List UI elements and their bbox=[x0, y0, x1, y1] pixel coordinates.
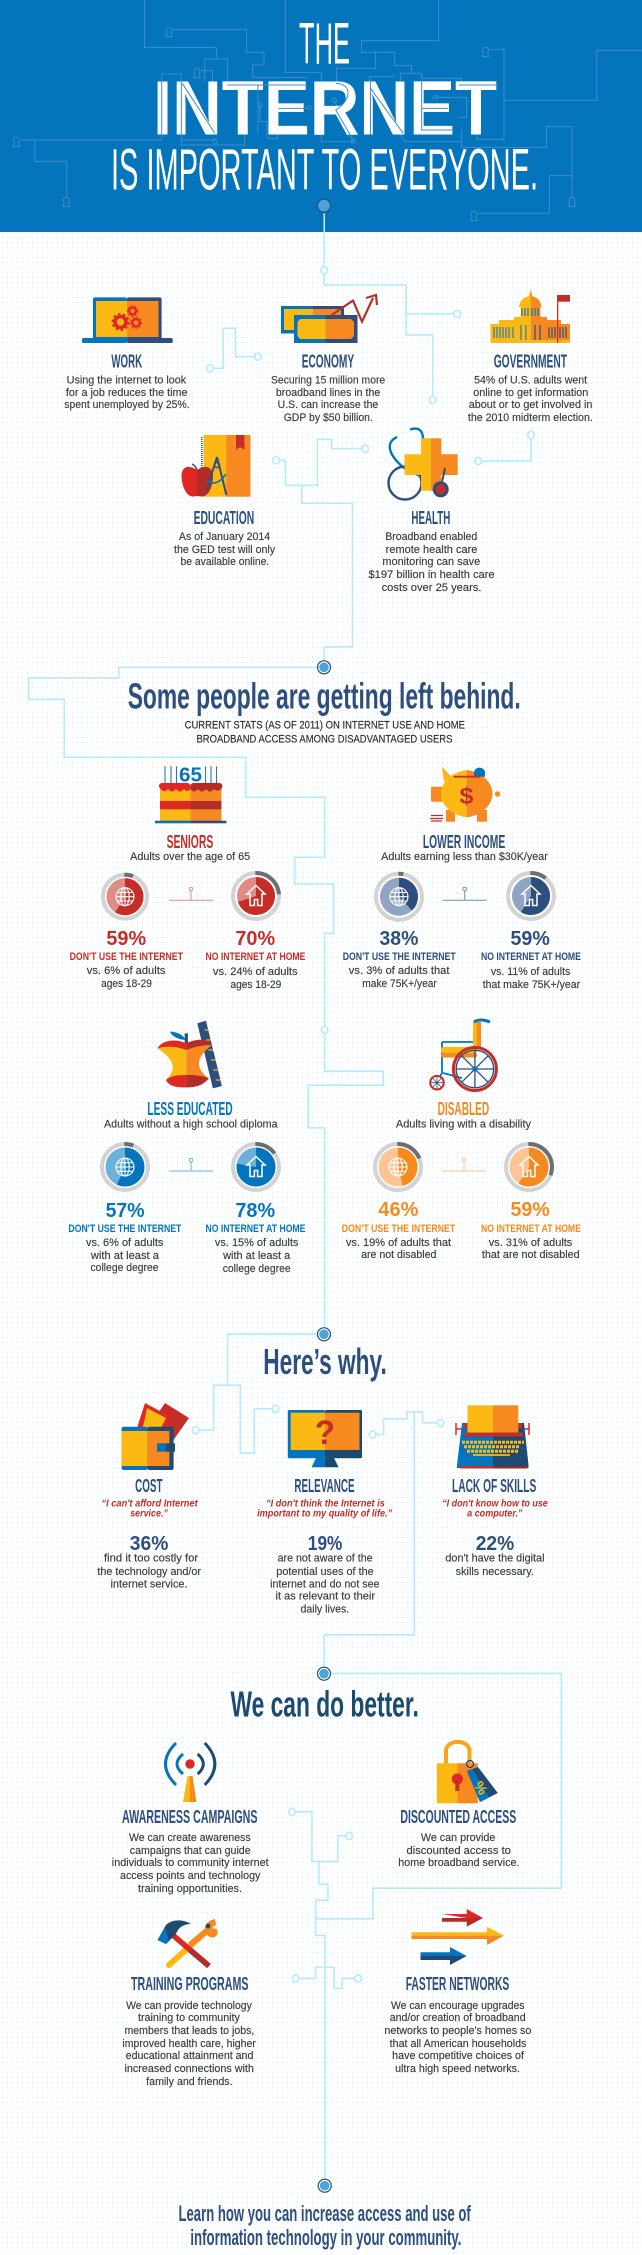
stat: 78 percent no internet at home: 78% bbox=[235, 1199, 275, 1222]
text: awareness description: campaigns that can guide bbox=[130, 1845, 251, 1857]
heading: we can do better: We can do better. bbox=[230, 1684, 419, 1725]
text: economy stat: Securing 15 million more bbox=[271, 374, 385, 386]
panel: government bbox=[468, 289, 593, 424]
text: government stat: 54% of U.S. adults went bbox=[474, 374, 587, 386]
text: government stat: online to get information bbox=[473, 387, 588, 399]
heading: lower income: LOWER INCOME bbox=[423, 831, 505, 852]
text: relevance explanation bbox=[270, 1553, 380, 1616]
stat: 38 percent don't use the internet: DON'T USE THE INTERNET bbox=[343, 951, 456, 963]
stat: 70 percent no internet at home bbox=[206, 927, 306, 991]
panel: awareness campaigns bbox=[112, 1743, 269, 1895]
connector: seniors bbox=[169, 887, 213, 900]
text: economy stat: GDP by $50 billion. bbox=[284, 412, 373, 424]
text: skills explanation: don't have the digital bbox=[445, 1553, 544, 1565]
connector lines: section four bbox=[289, 1673, 561, 2181]
icon: birthday cake bbox=[155, 765, 226, 823]
node: header bbox=[318, 199, 330, 212]
text: economy stat bbox=[271, 374, 385, 424]
text: health stat: remote health care bbox=[386, 544, 477, 556]
stat: 78 percent no internet at home: college degree bbox=[223, 1263, 291, 1275]
icon: broadcast antenna bbox=[166, 1743, 215, 1802]
stat: 59 percent don't use the internet bbox=[70, 927, 183, 990]
node: footer bbox=[318, 2179, 331, 2192]
icon: padlock with price tag: % bbox=[471, 1778, 492, 1798]
text: training description: improved health care, higher bbox=[122, 2038, 256, 2050]
panel: header banner bbox=[0, 0, 642, 232]
heading: lack of skills: LACK OF SKILLS bbox=[452, 1475, 536, 1496]
header circuit lines bbox=[13, 0, 642, 221]
footer: call to action bbox=[178, 2201, 471, 2250]
text: awareness description: We can create awareness bbox=[129, 1832, 251, 1844]
text: work stat: Using the internet to look bbox=[67, 374, 187, 386]
panel: less educated bbox=[68, 1021, 306, 1275]
icon: wheelchair bbox=[430, 1020, 496, 1090]
text: cost explanation: internet service. bbox=[110, 1579, 188, 1591]
inline strokes across the title letters bbox=[162, 80, 497, 142]
stat: 59 percent no internet at home: 59% bbox=[510, 1198, 550, 1221]
text: work stat bbox=[64, 374, 190, 411]
node: section three bbox=[318, 1328, 330, 1341]
panel: faster networks bbox=[384, 1909, 532, 2075]
text: less educated description: Adults without a high school diploma bbox=[104, 1118, 278, 1130]
text: cost explanation: find it too costly for bbox=[104, 1553, 199, 1565]
quote: lack of skills: “I don't know how to use bbox=[442, 1499, 548, 1510]
stat: 59 percent no internet at home: vs. 31% of adults bbox=[489, 1237, 572, 1249]
text: work stat: for a job reduces the time bbox=[66, 387, 188, 399]
chart: less educated don't use internet donut bbox=[102, 1144, 148, 1190]
panel: lack of skills bbox=[442, 1405, 548, 1578]
quote: cost: “I can't afford Internet bbox=[102, 1499, 198, 1510]
text: economy stat: U.S. can increase the bbox=[278, 399, 378, 411]
heading: education: EDUCATION bbox=[194, 507, 254, 528]
heading: training programs: TRAINING PROGRAMS bbox=[131, 1973, 248, 1994]
footer: call to action: information technology in your community. bbox=[190, 2225, 461, 2250]
connector: less educated bbox=[169, 1158, 213, 1171]
stat: 57 percent don't use the internet: college degree bbox=[90, 1262, 159, 1274]
stat: 59 percent don't use the internet: 59% bbox=[106, 927, 146, 950]
text: training description: members that leads to jobs, bbox=[124, 2025, 254, 2037]
stat: 78 percent no internet at home: NO INTERNET AT HOME bbox=[206, 1223, 306, 1235]
stat: 59 percent no internet at home: 59% bbox=[510, 927, 550, 950]
stat: 59 percent don't use the internet: ages 18-29 bbox=[101, 978, 152, 990]
text: training description: training to community bbox=[138, 2012, 241, 2024]
text: lower income description: Adults earning less than $30K/year bbox=[381, 851, 548, 863]
heading: seniors: SENIORS bbox=[167, 831, 213, 852]
stat: 59 percent no internet at home: NO INTERNET AT HOME bbox=[481, 1223, 581, 1235]
chart: less educated no internet at home donut bbox=[233, 1144, 279, 1190]
connector lines: section two bbox=[29, 667, 383, 1328]
node: section two bbox=[318, 661, 330, 674]
text: economy stat: broadband lines in the bbox=[276, 387, 380, 399]
text: health stat: $197 billion in health care bbox=[368, 569, 495, 581]
text: skills explanation: skills necessary. bbox=[456, 1566, 534, 1578]
text: faster networks description: that all American households bbox=[390, 2038, 526, 2050]
text: faster networks description: ultra high speed networks. bbox=[395, 2063, 520, 2075]
text: training description: We can provide technology bbox=[126, 2000, 252, 2012]
text: awareness description: individuals to community internet bbox=[112, 1857, 269, 1869]
panel: discounted access bbox=[398, 1742, 520, 1869]
stat: 70 percent no internet at home: ages 18-29 bbox=[230, 979, 281, 991]
stat: 78 percent no internet at home: with at least a bbox=[222, 1250, 290, 1262]
text: education stat bbox=[174, 531, 276, 568]
icon: piggy bank: $ bbox=[460, 783, 474, 809]
panel: economy bbox=[271, 295, 385, 424]
heading: less educated: LESS EDUCATED bbox=[147, 1098, 233, 1119]
icon: piggy bank bbox=[430, 767, 500, 822]
text: relevance explanation: are not aware of the bbox=[278, 1553, 373, 1565]
text: awareness description bbox=[112, 1832, 269, 1895]
stat: 57 percent don't use the internet: vs. 6% of adults bbox=[86, 1237, 163, 1249]
quote: relevance: “I don't think the Internet is bbox=[266, 1499, 385, 1510]
quote: relevance bbox=[257, 1499, 393, 1520]
connector: lower income bbox=[442, 887, 487, 900]
icon: monitor with question mark: ? bbox=[315, 1414, 335, 1452]
icon: medical cross and stethoscope bbox=[388, 429, 458, 500]
text: discounted description bbox=[398, 1832, 520, 1869]
title: Internet: INTERNET bbox=[153, 65, 497, 151]
text: relevance explanation: potential uses of the bbox=[276, 1566, 374, 1578]
heading: cost: COST bbox=[135, 1475, 163, 1496]
text: education stat: the GED test will only bbox=[174, 544, 276, 556]
panel: relevance bbox=[257, 1410, 393, 1616]
text: relevance explanation: it as relevant to their bbox=[276, 1591, 375, 1603]
text: government stat: the 2010 midterm election. bbox=[468, 412, 593, 424]
chart: lower income don't use internet donut bbox=[376, 874, 422, 920]
heading: discounted access: DISCOUNTED ACCESS bbox=[400, 1806, 516, 1827]
text: government stat: about or to get involved in bbox=[469, 399, 593, 411]
text: relevance explanation: daily lives. bbox=[300, 1604, 349, 1616]
stat: 36 percent: 36% bbox=[130, 1532, 168, 1555]
stat: 38 percent don't use the internet: 38% bbox=[380, 927, 418, 950]
text: government stat bbox=[468, 374, 593, 424]
icon: book, apple and compass bbox=[181, 435, 250, 497]
text: training description: educational attainment and bbox=[126, 2050, 254, 2062]
icon: typewriter bbox=[456, 1405, 529, 1468]
icon: birthday cake: 65 bbox=[179, 765, 202, 787]
stat: 57 percent don't use the internet bbox=[68, 1199, 181, 1274]
connector lines: section one bbox=[207, 213, 534, 667]
icon: laptop bbox=[82, 297, 173, 343]
icon: money and growth arrow bbox=[281, 295, 377, 343]
text: discounted description: home broadband service. bbox=[398, 1857, 520, 1869]
text: discounted description: We can provide bbox=[421, 1832, 495, 1844]
text: faster networks description: We can encourage upgrades bbox=[391, 2000, 524, 2012]
stat: 59 percent no internet at home bbox=[481, 1198, 581, 1261]
stat: 78 percent no internet at home: vs. 15% of adults bbox=[215, 1237, 298, 1249]
stat: 59 percent no internet at home: NO INTERNET AT HOME bbox=[481, 951, 581, 963]
subheading: current stats: BROADBAND ACCESS AMONG DISADVANTAGED USERS bbox=[196, 733, 452, 745]
stat: 59 percent don't use the internet: DON'T USE THE INTERNET bbox=[70, 951, 183, 963]
text: discounted description: discounted access to bbox=[406, 1845, 511, 1857]
heading: government: GOVERNMENT bbox=[494, 350, 567, 371]
stat: 46 percent don't use the internet bbox=[342, 1198, 455, 1261]
text: cost explanation: the technology and/or bbox=[97, 1566, 201, 1578]
icon: monitor with question mark bbox=[288, 1410, 362, 1467]
panel: cost bbox=[97, 1403, 201, 1591]
heading: disabled: DISABLED bbox=[438, 1098, 489, 1119]
text: cost explanation bbox=[97, 1553, 201, 1591]
heading: here's why: Here’s why. bbox=[263, 1341, 387, 1382]
quote: lack of skills bbox=[442, 1499, 548, 1520]
heading: economy: ECONOMY bbox=[302, 350, 354, 371]
stat: 59 percent no internet at home: vs. 11% of adults bbox=[491, 966, 570, 978]
text: faster networks description: have competitive choices of bbox=[392, 2050, 524, 2062]
heading: relevance: RELEVANCE bbox=[294, 1475, 355, 1496]
quote: lack of skills: a computer.” bbox=[467, 1509, 523, 1520]
quote: cost bbox=[102, 1499, 198, 1520]
text: disabled description: Adults living with a disability bbox=[396, 1118, 532, 1130]
chart: disabled don't use internet donut bbox=[375, 1144, 421, 1190]
quote: cost: service.” bbox=[130, 1509, 169, 1520]
text: health stat: costs over 25 years. bbox=[382, 582, 482, 594]
text: health stat: Broadband enabled bbox=[385, 531, 477, 543]
stat: 59 percent don't use the internet: vs. 6% of adults bbox=[87, 965, 165, 977]
heading: faster networks: FASTER NETWORKS bbox=[406, 1973, 509, 1994]
stat: 57 percent don't use the internet: with at least a bbox=[90, 1250, 159, 1262]
text: faster networks description: and/or creation of broadband bbox=[390, 2012, 526, 2024]
icon: wallet with money bbox=[122, 1403, 189, 1470]
stat: 46 percent don't use the internet: DON'T USE THE INTERNET bbox=[342, 1223, 455, 1235]
text: awareness description: access points and technology bbox=[120, 1870, 261, 1882]
text: skills explanation bbox=[445, 1553, 544, 1578]
stat: 57 percent don't use the internet: DON'T USE THE INTERNET bbox=[68, 1223, 181, 1235]
panel: education bbox=[174, 435, 276, 568]
chart: seniors don't use internet donut bbox=[103, 875, 147, 919]
panel: seniors bbox=[70, 765, 306, 991]
stat: 70 percent no internet at home: NO INTERNET AT HOME bbox=[206, 951, 306, 963]
text: faster networks description: networks to people's homes so bbox=[384, 2025, 532, 2037]
stat: 59 percent no internet at home: that are not disabled bbox=[482, 1249, 580, 1261]
icon: speed arrows bbox=[412, 1909, 504, 1965]
text: seniors description: Adults over the age of 65 bbox=[130, 851, 250, 863]
stat: 59 percent no internet at home bbox=[481, 927, 581, 991]
stat: 46 percent don't use the internet: are not disabled bbox=[361, 1249, 437, 1261]
chart: lower income no internet at home donut bbox=[508, 873, 554, 919]
text: work stat: spent unemployed by 25%. bbox=[64, 399, 190, 411]
stat: 57 percent don't use the internet: 57% bbox=[106, 1199, 144, 1222]
stat: 38 percent don't use the internet: vs. 3% of adults that bbox=[349, 965, 450, 977]
panel: work bbox=[64, 297, 190, 411]
text: awareness description: training opportunities. bbox=[138, 1883, 242, 1895]
stat: 70 percent no internet at home: vs. 24% of adults bbox=[213, 966, 298, 978]
stat: 78 percent no internet at home bbox=[206, 1199, 306, 1275]
node: section four bbox=[318, 1667, 330, 1680]
heading: health: HEALTH bbox=[411, 507, 450, 528]
text: training description: increased connections with bbox=[124, 2063, 254, 2075]
subheading: current stats bbox=[185, 719, 465, 745]
heading: work: WORK bbox=[111, 350, 142, 371]
panel: header banner: THE bbox=[299, 11, 350, 76]
quote: relevance: important to my quality of life.” bbox=[257, 1509, 393, 1520]
heading: awareness campaigns: AWARENESS CAMPAIGNS bbox=[122, 1806, 258, 1827]
stat: 19 percent: 19% bbox=[308, 1532, 342, 1555]
chart: disabled no internet at home donut bbox=[506, 1144, 552, 1190]
text: faster networks description bbox=[384, 2000, 532, 2075]
text: education stat: be available online. bbox=[180, 556, 269, 568]
icon: apple core and ruler bbox=[158, 1021, 222, 1088]
stat: 59 percent no internet at home: that make 75K+/year bbox=[483, 979, 581, 991]
connector: disabled bbox=[442, 1158, 486, 1171]
subheading: current stats: CURRENT STATS (AS OF 2011) ON INTERNET USE AND HOME bbox=[185, 719, 465, 731]
text: education stat: As of January 2014 bbox=[179, 531, 270, 543]
panel: lower income bbox=[343, 767, 581, 991]
stat: 46 percent don't use the internet: vs. 19% of adults that bbox=[346, 1237, 451, 1249]
stat: 46 percent don't use the internet: 46% bbox=[378, 1198, 418, 1221]
text: health stat: monitoring can save bbox=[382, 556, 480, 568]
panel: training programs bbox=[122, 1919, 256, 2088]
stat: 38 percent don't use the internet: make 75K+/year bbox=[362, 978, 437, 990]
stat: 70 percent no internet at home: 70% bbox=[235, 927, 275, 950]
stat: 38 percent don't use the internet bbox=[343, 927, 456, 990]
panel: health bbox=[368, 429, 495, 594]
text: relevance explanation: internet and do not see bbox=[270, 1579, 380, 1591]
stat: 22 percent: 22% bbox=[476, 1532, 514, 1555]
panel: disabled bbox=[342, 1020, 581, 1261]
icon: crossed hammer and wrench bbox=[158, 1919, 218, 1966]
text: training description: family and friends. bbox=[146, 2076, 233, 2088]
connector lines: section three bbox=[192, 1334, 444, 1673]
text: health stat bbox=[368, 531, 495, 594]
chart: seniors no internet at home donut bbox=[233, 873, 279, 919]
icon: capitol building bbox=[490, 289, 570, 343]
text: training description bbox=[122, 2000, 256, 2088]
